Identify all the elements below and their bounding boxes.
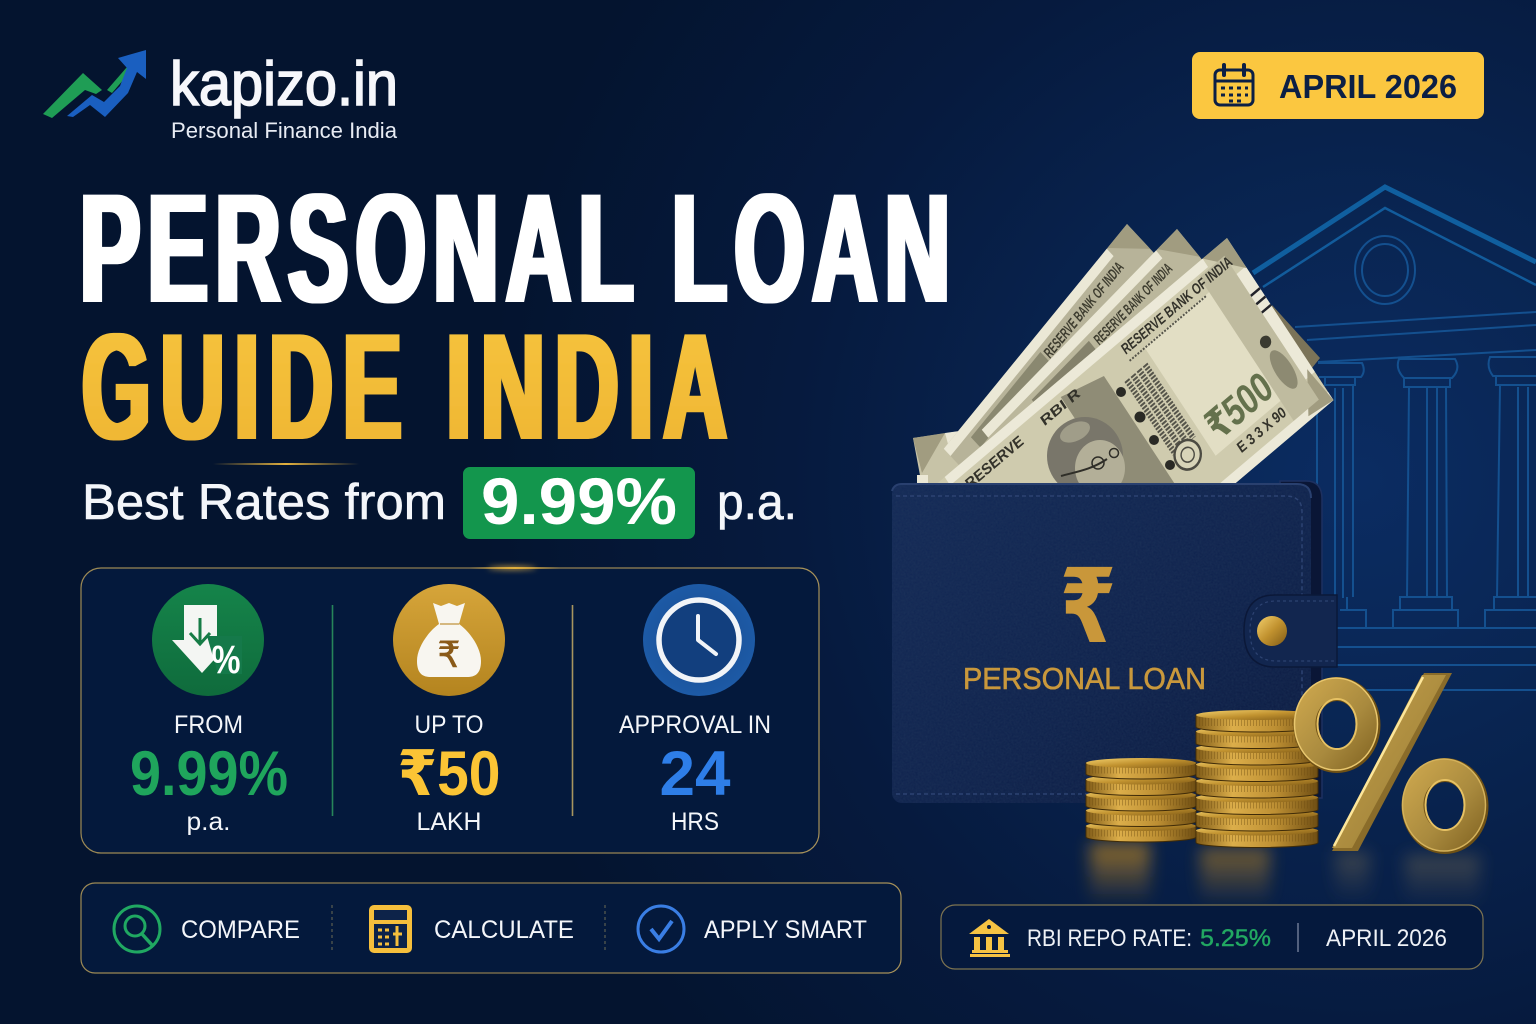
stat: amount: UP TO: [414, 711, 484, 739]
banknote: far left sliver: [913, 427, 990, 486]
note value: ₹500: [1197, 362, 1281, 450]
wallet: [892, 481, 1337, 803]
stat: rate: [130, 584, 288, 836]
icon: money bag: [393, 584, 505, 696]
stat: amount: LAKH: [416, 808, 482, 836]
icon: calendar: [1215, 65, 1253, 105]
panel: actions strip: [81, 883, 901, 973]
slash: [1332, 673, 1452, 851]
banknote: middle: [982, 229, 1303, 584]
banknote: front: RBI R: [1037, 385, 1083, 429]
wallet label: PERSONAL LOAN: [963, 661, 1206, 696]
icon: rate down: [152, 584, 264, 696]
action: apply smart: [638, 906, 867, 952]
action: compare: [114, 906, 300, 952]
banknote: back: RESERVE BANK OF INDIA: [1041, 258, 1127, 362]
action: calculate: [369, 905, 574, 953]
gold coin stacks: [1086, 710, 1318, 847]
floor reflections: [1090, 843, 1480, 906]
action: apply smart: APPLY SMART: [704, 916, 867, 944]
banknote: front: E 3 3 X 90: [1234, 404, 1289, 457]
stat: rate: p.a.: [186, 808, 230, 836]
icon: calculator: [369, 905, 412, 953]
bank outline illustration: [1253, 187, 1536, 690]
banknote: back: [944, 224, 1263, 595]
panel: key stats: [81, 566, 819, 853]
title: [80, 163, 950, 472]
rate pill: 9.99%: [481, 464, 677, 538]
column right: [1485, 357, 1536, 627]
icon: clock: [643, 584, 755, 696]
subtitle: best rates: [82, 464, 797, 539]
RBI repo rate bar: [941, 905, 1483, 969]
icon: rate down: %: [212, 638, 240, 682]
banknotes: [913, 224, 1334, 646]
repo rate date: APRIL 2026: [1326, 925, 1447, 952]
icon: money bag: ₹: [438, 634, 460, 675]
date text: APRIL 2026: [1279, 68, 1457, 105]
coin stack: small: [1086, 758, 1196, 842]
stat: approval: HRS: [671, 808, 719, 836]
icon: search: [114, 906, 160, 952]
brand name: kapizo.in: [170, 50, 398, 119]
action: calculate: CALCULATE: [434, 916, 574, 944]
column left: [1317, 363, 1366, 627]
repo rate label: RBI REPO RATE:: [1027, 925, 1192, 952]
title line 1: PERSONAL LOAN: [80, 163, 950, 336]
banknote: front: RESERVE: [963, 432, 1027, 493]
stat: approval: APPROVAL IN: [619, 711, 771, 739]
logo: kapizo.in: [43, 50, 398, 143]
subtitle: best rates: Best Rates from: [82, 474, 446, 530]
gold percent symbol: [1294, 673, 1486, 851]
stat: rate: FROM: [174, 711, 243, 739]
note hatch text: [1127, 365, 1193, 454]
stat: rate: 9.99%: [130, 739, 288, 809]
stat: amount: ₹50: [398, 739, 500, 809]
tagline: Personal Finance India: [171, 118, 398, 143]
date badge: [1192, 52, 1484, 119]
icon: check circle: [638, 906, 684, 952]
first zero: [1294, 678, 1378, 770]
banknote sliver behind front: [1270, 305, 1320, 368]
rupee emblem: ₹: [1060, 549, 1116, 664]
repo rate value: 5.25%: [1200, 925, 1271, 952]
stat: approval: [619, 584, 771, 836]
banknote: middle: RESERVE BANK OF INDIA: [1091, 260, 1176, 349]
subtitle: best rates: p.a.: [717, 474, 797, 530]
wallet clasp: [1244, 595, 1337, 667]
portrait: [1047, 417, 1125, 496]
banknote: front: RESERVE BANK OF INDIA: [1119, 253, 1236, 358]
title line 2: GUIDE INDIA: [82, 303, 727, 472]
stat: amount: [393, 584, 505, 836]
stat: approval: 24: [660, 739, 730, 809]
banknote: front: [937, 238, 1334, 646]
coin stack: tall: [1196, 710, 1318, 847]
column centre: [1393, 359, 1458, 627]
action: compare: COMPARE: [181, 916, 300, 944]
second zero: [1402, 759, 1486, 851]
icon: bank: [969, 919, 1010, 957]
icon: growth arrow: [43, 50, 146, 118]
